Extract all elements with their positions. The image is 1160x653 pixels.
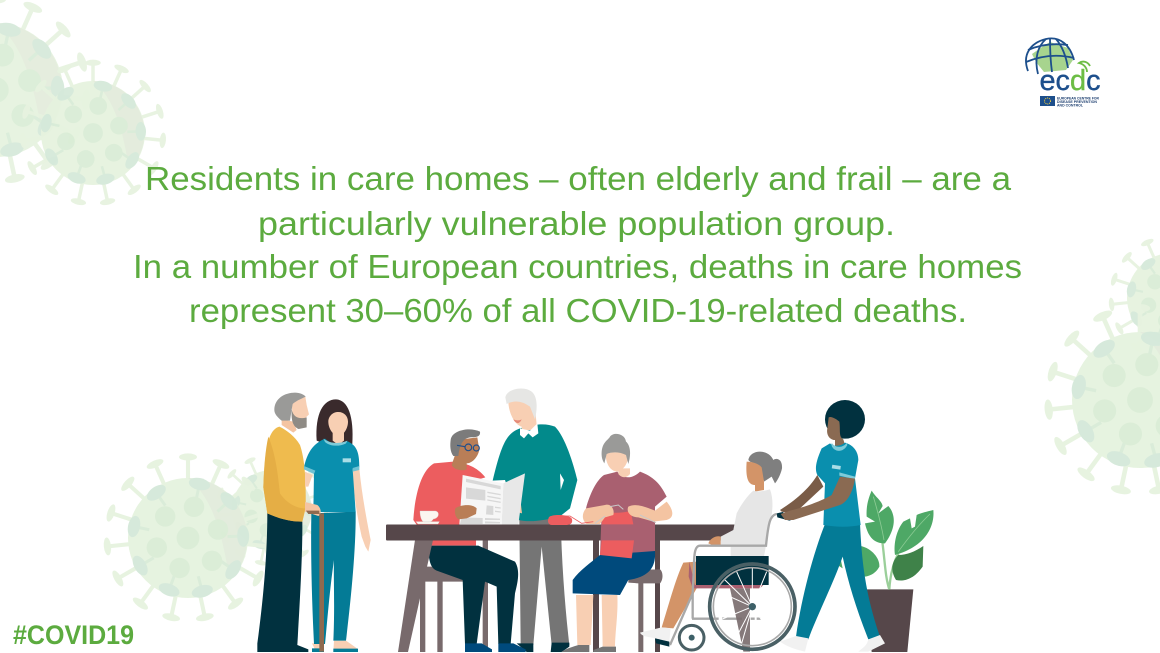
big wheel — [710, 564, 795, 652]
ponytail and head — [748, 452, 782, 483]
illustration: people around a table — [257, 389, 934, 652]
afro hair — [825, 400, 865, 439]
logo sprout — [1079, 62, 1090, 72]
hashtag: #COVID19 — [13, 620, 134, 650]
shoes — [780, 635, 885, 652]
logo: ECDC — [1026, 38, 1100, 108]
table right legs — [593, 540, 660, 652]
yarn ball on table — [548, 515, 572, 525]
shoe — [640, 627, 671, 642]
caption line 3: AND CONTROL — [1057, 104, 1084, 108]
nurse with dark hair — [304, 399, 371, 652]
logo globe — [1026, 38, 1074, 74]
logo EU flag — [1040, 96, 1055, 106]
caption line 2: DISEASE PREVENTION — [1057, 100, 1097, 104]
arms — [780, 475, 823, 513]
frame — [670, 514, 777, 645]
trousers — [796, 523, 880, 639]
standing man in green sweater — [493, 389, 577, 652]
coffee cup — [416, 511, 439, 524]
virus: right small — [1108, 235, 1160, 361]
headline line 1: Residents in care homes – often elderly and frail – are a — [145, 160, 1012, 197]
virus: top left small — [19, 60, 167, 206]
newspaper — [459, 473, 525, 525]
headline line 3: In a number of European countries, deaths in care homes — [133, 248, 1022, 285]
hand and cane — [305, 502, 324, 652]
right scene — [560, 400, 934, 652]
seated man reading newspaper — [413, 429, 526, 652]
potted plant — [835, 491, 934, 652]
virus: behind standing couple — [215, 454, 329, 566]
leg — [662, 562, 697, 628]
virus: lower left large — [103, 453, 273, 623]
left scene — [257, 389, 577, 652]
top — [816, 443, 861, 527]
knitting woman — [560, 434, 672, 652]
table top — [386, 524, 736, 540]
headline line 4: represent 30–60% of all COVID-19-related deaths. — [189, 292, 967, 329]
caption line 1: EUROPEAN CENTRE FOR — [1057, 96, 1099, 100]
logo caption — [1057, 96, 1099, 108]
logo wordmark: ecdc — [1040, 65, 1100, 97]
headline line 2: particularly vulnerable population group. — [258, 205, 895, 242]
headline text — [133, 160, 1022, 329]
virus: right large — [1044, 304, 1160, 496]
seat back navy — [696, 556, 769, 585]
face — [827, 417, 846, 450]
woman in wheelchair — [640, 452, 795, 652]
virus: top left large — [0, 0, 91, 184]
old man — [257, 393, 309, 652]
table left leg — [398, 540, 433, 652]
cushion — [689, 562, 763, 588]
sweater — [721, 489, 772, 557]
chair — [420, 540, 497, 652]
table — [386, 524, 736, 652]
nurse pushing wheelchair — [780, 400, 885, 652]
small wheel — [679, 625, 704, 650]
